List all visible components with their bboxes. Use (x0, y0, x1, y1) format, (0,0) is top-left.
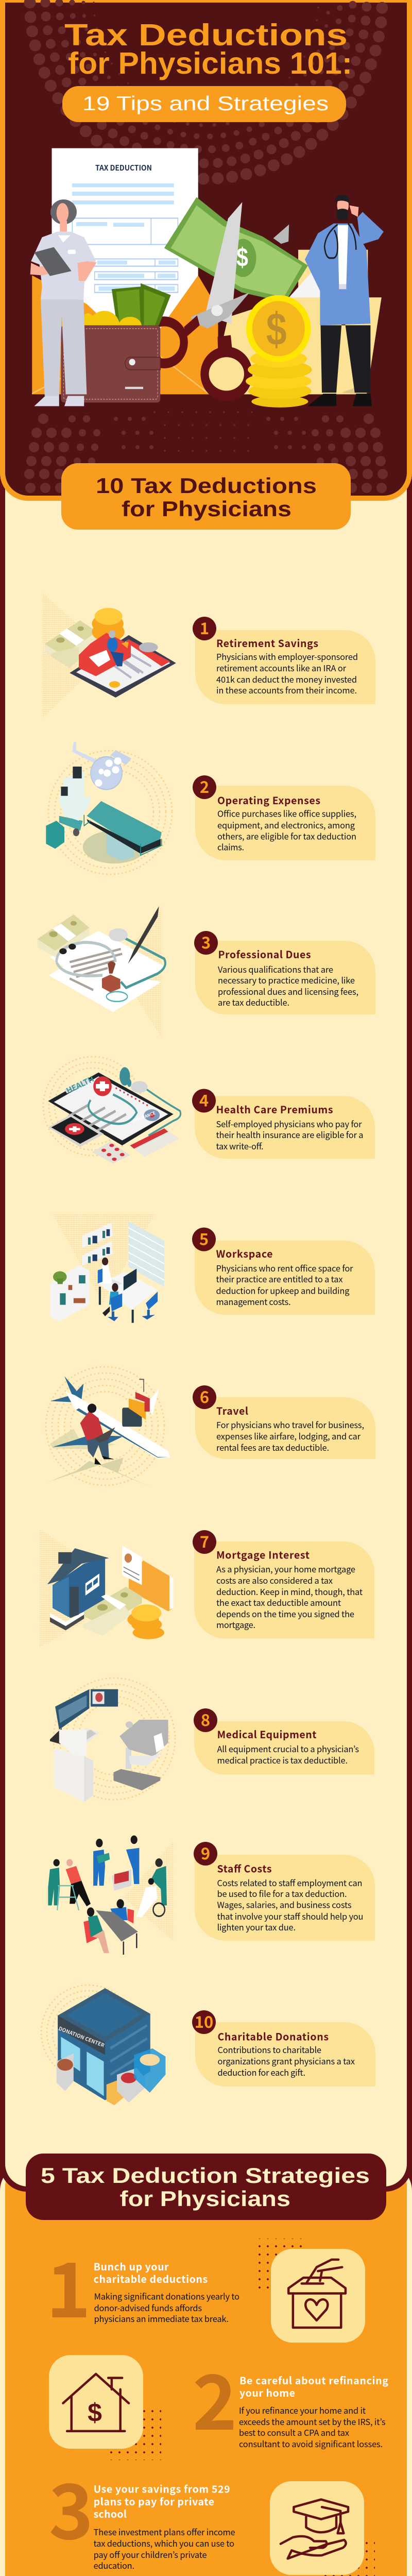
card 3: professional dues (194, 930, 375, 1014)
illustration: charitable donations (41, 1985, 165, 2105)
heading: 10 tax deductions (61, 463, 351, 530)
card 5: workspace: management costs. (216, 1295, 290, 1308)
card 4: health care premiums: Self-employed physicians who pay for (216, 1117, 362, 1130)
label: health insurance: HEALTH (64, 1073, 96, 1096)
card 7: mortgage interest (193, 1529, 374, 1638)
card 5: workspace: 5 (199, 1227, 209, 1250)
card 5: workspace: Workspace (216, 1246, 273, 1261)
card 3: professional dues: are tax deductible. (218, 996, 289, 1008)
card 4: health care premiums: their health insurance are eligible for a (216, 1128, 364, 1141)
title: Tax Deductions (64, 18, 348, 52)
icon: dollar sign: $ (88, 2398, 102, 2427)
strategy 3: 529 plans: 3 (49, 2451, 93, 2561)
card 7: mortgage interest: mortgage. (216, 1618, 255, 1631)
strategy 1: charitable deductions (46, 2230, 365, 2343)
card 2: operating expenses: 2 (200, 774, 209, 798)
card 9: staff costs (194, 1841, 375, 1941)
heading: 5 strategies (26, 2154, 386, 2220)
strategy 2: refinancing: Be careful about refinancing (239, 2372, 388, 2387)
heading: 5 strategies: for Physicians (119, 2187, 290, 2211)
card 9: staff costs: Staff Costs (217, 1861, 272, 1875)
card 3: professional dues: professional dues and licensing fees, (218, 985, 358, 997)
card 9: staff costs: Costs related to staff employment can (217, 1876, 363, 1889)
card 9: staff costs: be used to file for a tax deduction. (217, 1887, 347, 1900)
halftone dots: bottom clusters (29, 412, 383, 488)
card 6: travel (193, 1384, 375, 1459)
card 5: workspace: Physicians who rent office space for (216, 1262, 353, 1274)
title (64, 18, 352, 80)
card 1: retirement savings: in these accounts from their income. (216, 684, 357, 696)
card 3: professional dues: Various qualifications that are (218, 963, 333, 975)
card 8: medical equipment: 8 (201, 1707, 210, 1731)
card 5: workspace (192, 1227, 375, 1315)
label: insurance card: INSURANCE (132, 1110, 156, 1124)
card 9: staff costs: Wages, salaries, and business costs (217, 1898, 352, 1910)
illustration: workspace (50, 1214, 164, 1323)
illustration: retirement savings (42, 592, 176, 718)
strategy 1: charitable deductions: donor-advised funds affords (94, 2301, 202, 2314)
strategy 2: refinancing: best to consult a CPA and tax (239, 2426, 349, 2438)
card 6: travel: Travel (216, 1403, 248, 1418)
hero illustration: envelope, money, scissors, wallet, people: $ (266, 304, 287, 355)
card 9: staff costs: 9 (201, 1841, 210, 1864)
panel: hero (0, 0, 412, 501)
strategy 1: charitable deductions: Bunch up your (94, 2259, 169, 2274)
illustration: health care premiums (43, 1057, 181, 1163)
card 1: retirement savings: Retirement Savings (216, 635, 318, 650)
card 2: operating expenses: Office purchases like office supplies, (217, 807, 356, 819)
strategy 3: 529 plans: pay off your children’s private (94, 2548, 207, 2561)
card 7: mortgage interest: the exact tax deductible amount (216, 1596, 341, 1608)
card 1: retirement savings: Physicians with employer-sponsored (216, 650, 358, 663)
card 1: retirement savings: 401k can deduct the money invested (216, 673, 357, 685)
strategy 2: refinancing: exceeds the amount set by the IRS, it’s (239, 2415, 386, 2428)
card 1: retirement savings: 1 (200, 616, 209, 639)
label: donation center: DONATION CENTER (58, 2024, 106, 2049)
card 6: travel: expenses like airfare, lodging, and car (216, 1430, 361, 1442)
document heading: TAX DEDUCTION (95, 162, 152, 173)
card 10: charitable donations: deduction for each gift. (217, 2066, 305, 2078)
card 1: retirement savings (193, 616, 375, 704)
card 5: workspace: their practice are entitled to a tax (216, 1273, 343, 1285)
card 4: health care premiums: 4 (199, 1088, 209, 1111)
card 9: staff costs: that involve your staff should help you (217, 1910, 364, 1922)
strategy 1: charitable deductions: physicians an immediate tax break. (94, 2312, 229, 2325)
card 7: mortgage interest: deduction. Keep in mind, though, that (216, 1585, 363, 1598)
strategy 2: refinancing: consultant to avoid significant losses. (239, 2437, 383, 2450)
illustration: medical equipment (50, 1678, 175, 1802)
card 9: staff costs: lighten your tax due. (217, 1921, 296, 1933)
card 7: mortgage interest: Mortgage Interest (216, 1547, 310, 1562)
heading: 10 tax deductions: 10 Tax Deductions (96, 473, 317, 498)
card 10: charitable donations: organizations grant physicians a tax (217, 2055, 355, 2067)
card 8: medical equipment: All equipment crucial to a physician’s (217, 1742, 359, 1755)
card 1: retirement savings: retirement accounts like an IRA or (216, 662, 347, 674)
card 6: travel: For physicians who travel for business, (216, 1418, 364, 1431)
card 7: mortgage interest: As a physician, your home mortgage (216, 1563, 355, 1575)
card 3: professional dues: 3 (201, 930, 211, 953)
card 5: workspace: deduction for upkeep and building (216, 1284, 349, 1296)
card 4: health care premiums: tax write-off. (216, 1140, 264, 1152)
strategy 3: 529 plans (49, 2451, 375, 2576)
card 6: travel: rental fees are tax deductible. (216, 1441, 329, 1453)
strategy 3: 529 plans: Use your savings from 529 (94, 2481, 230, 2496)
icon: graduation cap and hand (281, 2499, 348, 2558)
hero illustration: envelope, money, scissors, wallet, people: $ (236, 242, 248, 272)
card 6: travel: 6 (200, 1384, 209, 1408)
card 7: mortgage interest: depends on the time you signed the (216, 1607, 354, 1620)
card 10: charitable donations: Charitable Donations (217, 2029, 329, 2043)
strategy 2: refinancing: If you refinance your home and it (239, 2404, 366, 2416)
illustration: operating expenses (46, 742, 172, 874)
card 3: professional dues: necessary to practice medicine, like (218, 974, 355, 986)
strategy 3: 529 plans: school (94, 2506, 127, 2521)
card 7: mortgage interest: 7 (200, 1529, 209, 1552)
strategy 2: refinancing: your home (239, 2385, 295, 2400)
icon: donation box (288, 2260, 346, 2328)
strategy 2: refinancing (49, 2342, 388, 2460)
illustration: professional dues (37, 906, 166, 1038)
illustration: mortgage interest (40, 1529, 174, 1648)
strategy 3: 529 plans: education. (94, 2559, 134, 2571)
heading: 10 tax deductions: for Physicians (122, 497, 291, 521)
card 10: charitable donations (192, 2009, 375, 2087)
strategy 1: charitable deductions: Making significant donations yearly to (94, 2290, 239, 2302)
card 4: health care premiums (192, 1088, 375, 1159)
hero illustration: envelope, money, scissors, wallet, people (30, 194, 384, 408)
strategy 3: 529 plans: tax deductions, which you can use to (94, 2537, 234, 2549)
strategy 3: 529 plans: These investment plans offer income (94, 2526, 235, 2538)
card 10: charitable donations: 10 (195, 2009, 213, 2032)
card 2: operating expenses: others, are eligible for tax deduction (217, 829, 356, 842)
halftone dots: top arc (30, 3, 382, 179)
card 2: operating expenses: Operating Expenses (217, 792, 320, 807)
card 2: operating expenses (193, 774, 375, 860)
title: for Physicians 101: (68, 46, 352, 80)
heading: 5 strategies: 5 Tax Deduction Strategies (41, 2163, 370, 2188)
illustration: staff costs (48, 1836, 174, 1955)
illustration: travel (46, 1367, 170, 1488)
card 7: mortgage interest: costs are also considered a tax (216, 1574, 333, 1586)
subtitle pill (62, 86, 346, 122)
subtitle pill: 19 Tips and Strategies (82, 93, 329, 115)
card 3: professional dues: Professional Dues (218, 946, 311, 961)
icon: house with dollar (63, 2374, 129, 2431)
card 8: medical equipment (194, 1707, 374, 1774)
strategy 3: 529 plans: plans to pay for private (94, 2494, 214, 2509)
card 2: operating expenses: claims. (217, 841, 244, 853)
card 8: medical equipment: medical practice is tax deductible. (217, 1754, 348, 1766)
card 2: operating expenses: equipment, and electronics, among (217, 819, 355, 831)
strategy 1: charitable deductions: charitable deductions (94, 2271, 208, 2286)
panel: deductions background (0, 412, 412, 2192)
hero illustration: background pieces (52, 148, 368, 393)
strategy 2: refinancing: 2 (193, 2342, 237, 2452)
panel: strategies background (0, 2164, 412, 2576)
card 8: medical equipment: Medical Equipment (217, 1726, 316, 1741)
card 4: health care premiums: Health Care Premiums (216, 1101, 333, 1116)
card 10: charitable donations: Contributions to charitable (217, 2043, 321, 2056)
strategy 1: charitable deductions: 1 (46, 2230, 91, 2340)
